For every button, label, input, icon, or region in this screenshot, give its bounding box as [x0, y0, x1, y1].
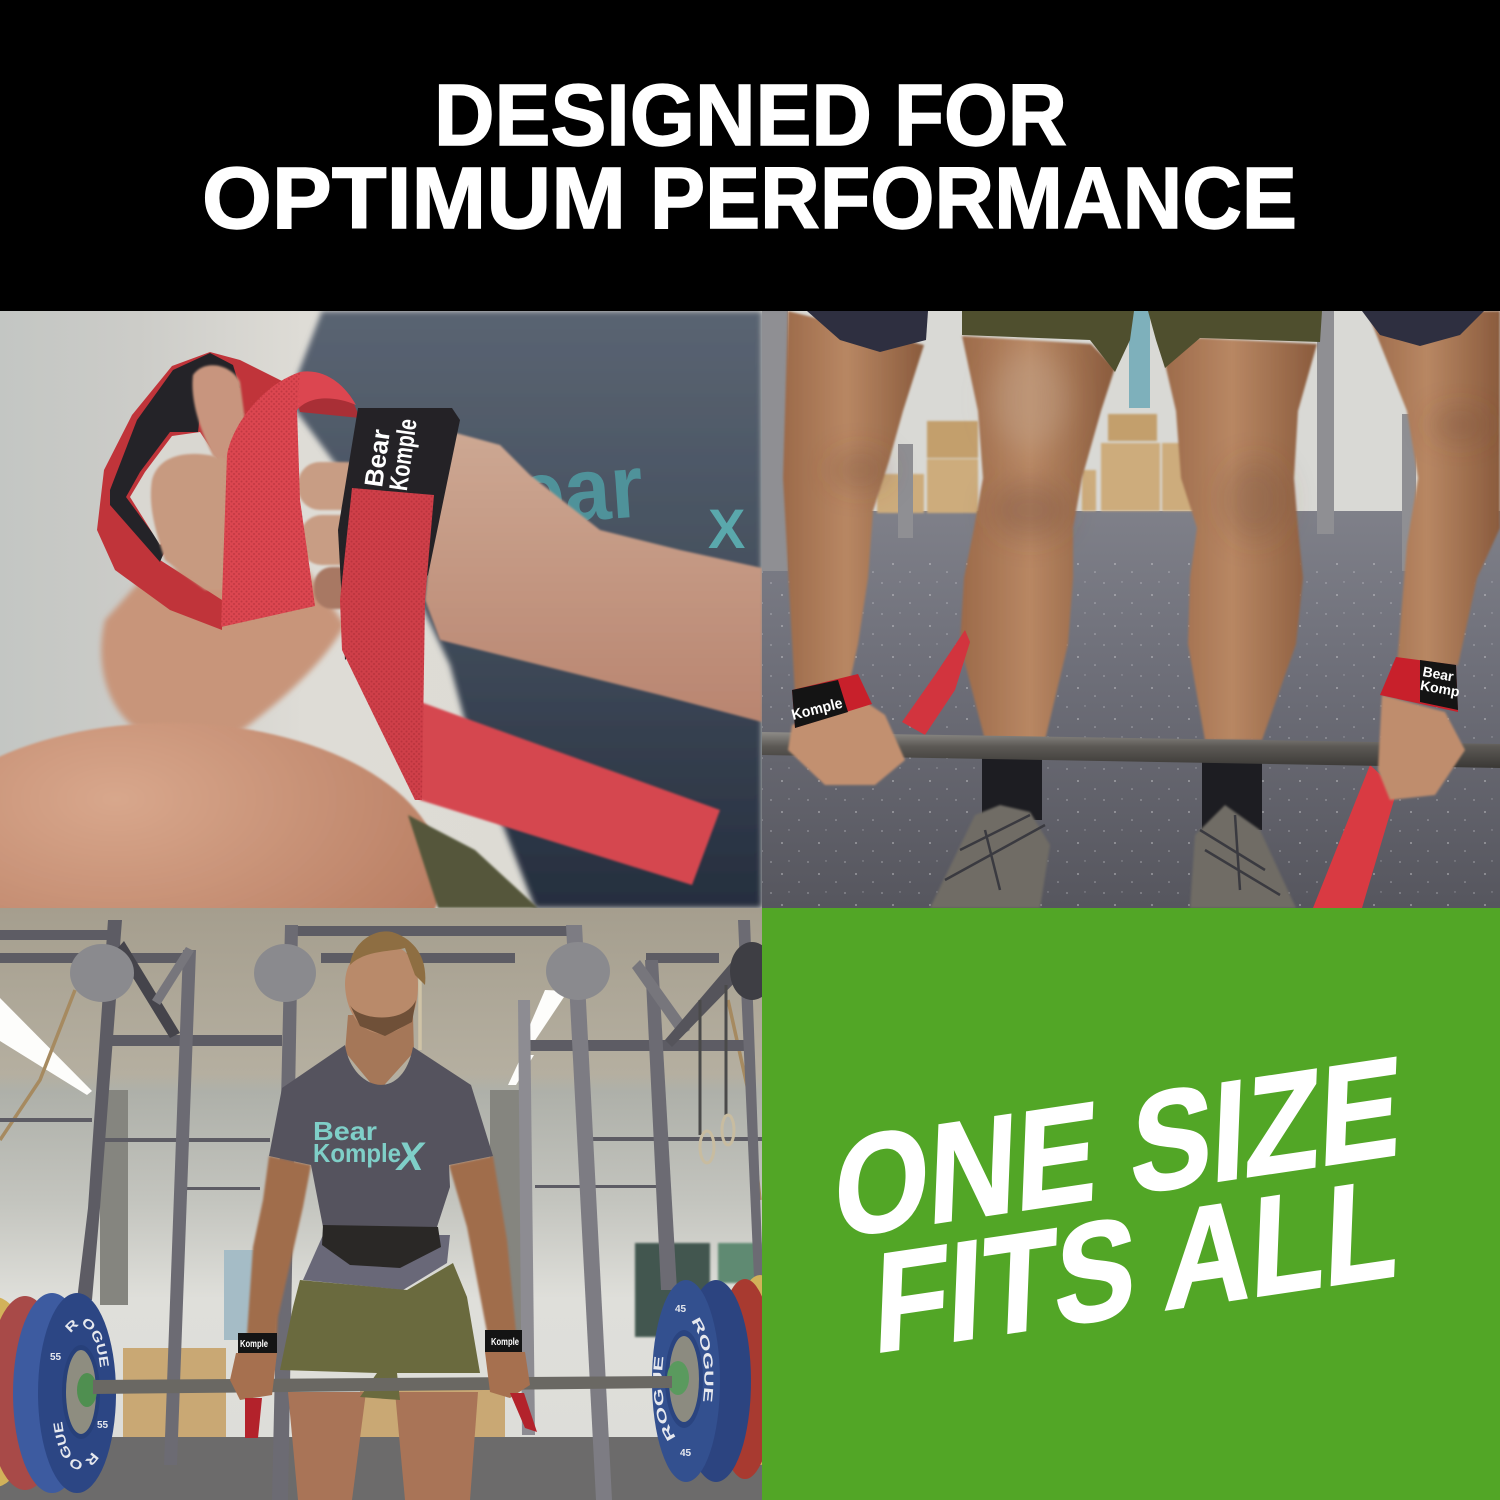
- slogan: FITS ALL: [872, 1148, 1402, 1384]
- right shoe: [1190, 805, 1296, 908]
- yellow plate: [0, 1297, 35, 1487]
- knee shadow right: [1223, 460, 1287, 540]
- beard: [350, 1000, 416, 1036]
- shirt logo: Komple: [313, 1138, 401, 1168]
- shirt logo: X: [395, 1135, 426, 1179]
- title: OPTIMUM: [202, 150, 626, 247]
- rack discs: [70, 942, 774, 1002]
- leg shading: [830, 350, 1490, 540]
- blue plate side: [13, 1293, 91, 1493]
- red strap ends: [245, 1393, 537, 1438]
- plate lettering: [50, 1318, 109, 1470]
- rack uprights: [762, 311, 1416, 571]
- left arm: [783, 311, 924, 695]
- legs: [288, 1392, 478, 1500]
- plate lettering: ROGUE: [64, 1318, 109, 1368]
- barbell left: [93, 1376, 672, 1394]
- red loop: [97, 352, 290, 630]
- barbell: [762, 732, 1500, 768]
- wrap text: [1419, 663, 1463, 700]
- shirt logo: X: [708, 497, 745, 560]
- wrap band: [485, 1330, 522, 1352]
- wrap text: Komple: [491, 1337, 519, 1348]
- panel: one size fits all: [762, 908, 1500, 1500]
- brick columns: [100, 1090, 525, 1330]
- right poster: [635, 1243, 710, 1337]
- arm crease left: [830, 452, 890, 488]
- ropes: [0, 960, 760, 1200]
- lifting belt: [322, 1225, 441, 1268]
- strap back fold: [298, 394, 358, 418]
- olive shorts left: [962, 311, 1134, 372]
- grey t-shirt: [288, 311, 762, 908]
- red strap end right: [1313, 765, 1397, 908]
- panel: strap close-up photo: [0, 311, 762, 908]
- rack braces: [116, 941, 180, 1038]
- wrap red part: [792, 674, 872, 728]
- plate collar: [667, 1361, 689, 1395]
- left wrist wrap: [238, 1333, 277, 1353]
- wooden plyo boxes: [877, 414, 1193, 513]
- wrap text: Bear: [1421, 663, 1455, 684]
- arm crease right: [1430, 409, 1490, 441]
- gymnastic rings: [700, 985, 734, 1163]
- wrap red part: [1380, 657, 1458, 712]
- shorts: [408, 815, 538, 908]
- face: [345, 945, 418, 1034]
- right plates: [652, 1275, 762, 1482]
- left shoe: [930, 805, 1050, 908]
- wrap band: [238, 1333, 277, 1353]
- header band: [0, 0, 1500, 311]
- gym wall: [0, 908, 762, 1500]
- shirt logo: Bear: [313, 1116, 377, 1146]
- title: FOR: [894, 67, 1067, 164]
- wrist strap tail: [415, 700, 720, 885]
- right wrist wrap: [485, 1330, 522, 1352]
- hands: [230, 1352, 530, 1400]
- olive shorts right: [1148, 311, 1322, 368]
- label: brand name: [364, 420, 419, 490]
- knee highlight left: [992, 350, 1068, 450]
- label: brand name: Bear: [358, 427, 396, 489]
- panel: full deadlift photo: [0, 908, 762, 1500]
- gym wall: [762, 311, 1500, 513]
- strap weave: [340, 488, 434, 800]
- title: [202, 67, 1297, 247]
- shorts: [280, 1263, 480, 1400]
- plate lettering: ROGUE: [692, 1317, 714, 1402]
- blue plate face: [38, 1293, 116, 1493]
- left leg: [960, 336, 1115, 740]
- wall posters: [224, 1243, 762, 1340]
- opening in loop: [130, 432, 225, 545]
- neck and head: [345, 931, 425, 1092]
- blue plate face: [652, 1280, 720, 1482]
- plate hub ring: [665, 1330, 703, 1428]
- plate lettering: ROGUE: [653, 1356, 676, 1441]
- right arm: [449, 1156, 516, 1332]
- neck: [345, 1015, 414, 1092]
- left hand fingers: [150, 452, 226, 592]
- red strap body: [340, 488, 434, 800]
- wrap text: Komple: [790, 695, 844, 724]
- plate lettering: 55: [50, 1352, 62, 1363]
- left arm: [247, 1156, 311, 1335]
- slogan: [832, 1027, 1404, 1384]
- wrist strap: [338, 408, 460, 800]
- plate hub: [66, 1350, 96, 1434]
- fingers on the right hand: [299, 460, 350, 610]
- wall background: [0, 311, 762, 908]
- wrap text: Komp: [1419, 677, 1461, 700]
- left loop of strap: [97, 352, 290, 630]
- knee shadow left: [992, 482, 1068, 538]
- left hand: [788, 698, 905, 785]
- hanging red strap: [221, 371, 360, 627]
- left poster: [224, 1250, 282, 1340]
- hair: [350, 931, 425, 985]
- plate lettering: 55: [97, 1420, 109, 1431]
- power rack: [0, 920, 762, 1500]
- shirt logo: [532, 468, 745, 548]
- wrap text: Komple: [240, 1339, 268, 1350]
- green background: [762, 908, 1500, 1500]
- blue plate side: [681, 1280, 751, 1482]
- red plate: [0, 1296, 63, 1490]
- left wrist wrap: [790, 674, 872, 728]
- plate hub ring: [62, 1345, 100, 1439]
- gym floor: [762, 511, 1500, 908]
- floor speckle: [762, 560, 1500, 908]
- right hand: [1378, 695, 1465, 800]
- plate lettering: 45: [675, 1304, 687, 1315]
- near forearm and hand: [425, 430, 762, 722]
- plate lettering: [653, 1305, 714, 1456]
- left plates: [0, 1293, 116, 1493]
- strap weave: [221, 372, 315, 627]
- slogan: ONE SIZE: [832, 1027, 1404, 1269]
- t-shirt: [269, 1045, 493, 1227]
- floor: [0, 1437, 762, 1500]
- athlete: [93, 931, 672, 1500]
- title: PERFORMANCE: [650, 150, 1297, 247]
- blue poster: [1129, 311, 1150, 408]
- black neoprene padding: [110, 353, 240, 562]
- shoe laces: [945, 815, 1280, 895]
- right wrist wrap: [1380, 657, 1463, 712]
- navy shorts left: [807, 311, 928, 352]
- knee: [0, 724, 438, 908]
- right leg: [1162, 338, 1317, 740]
- far right poster: [718, 1243, 762, 1283]
- plate hub: [669, 1336, 699, 1422]
- black strap edge: [338, 408, 460, 660]
- title: DESIGNED: [434, 67, 872, 164]
- shirt logo: ear: [514, 436, 646, 545]
- rack columns: [77, 920, 122, 1300]
- plate lettering: 45: [680, 1448, 692, 1459]
- thumb: [192, 365, 245, 470]
- strap front fold: [221, 371, 356, 627]
- red strap end left: [902, 630, 970, 735]
- label: brand name: Komple: [383, 417, 423, 492]
- plate collar: [77, 1373, 97, 1407]
- shirt hem: [303, 1235, 450, 1290]
- panel: legs and barbell photo: [762, 311, 1500, 908]
- plate lettering: ROGUE: [53, 1422, 99, 1470]
- far forearm: [101, 560, 345, 742]
- red plate: [715, 1279, 775, 1479]
- wooden boxes: [123, 1348, 505, 1440]
- navy shorts right: [1362, 311, 1484, 346]
- right arm: [1367, 311, 1500, 665]
- shirt logo: [313, 1116, 426, 1179]
- yellow plate: [730, 1275, 790, 1465]
- wrap black label: [1420, 660, 1458, 710]
- wrap black label: [792, 680, 848, 728]
- black socks: [982, 755, 1262, 830]
- ceiling lights: [0, 990, 568, 1095]
